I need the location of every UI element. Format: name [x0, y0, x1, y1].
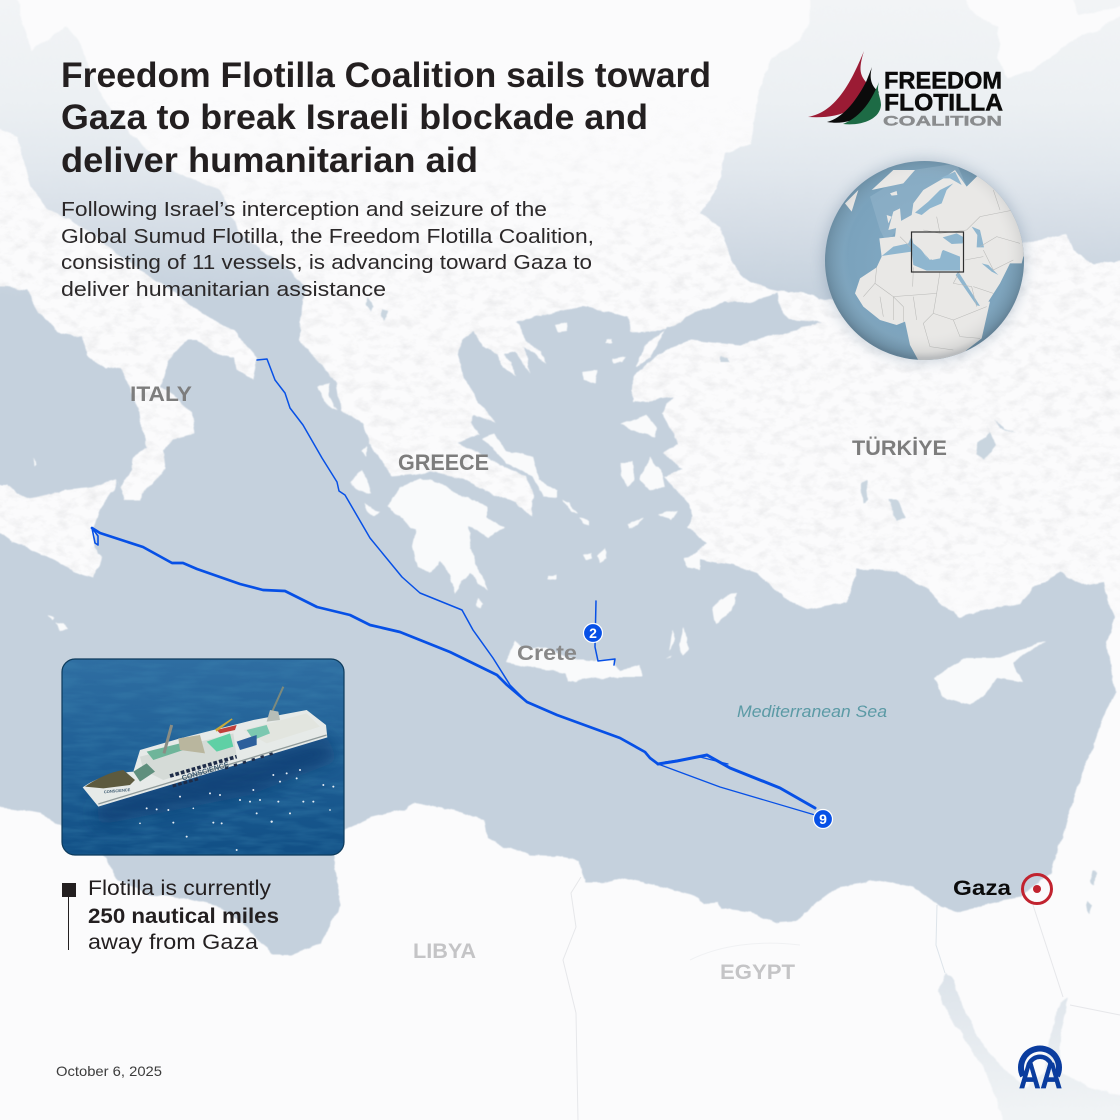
Gaza label and marker — [953, 874, 1052, 904]
logo: Freedom Flotilla Coalition — [808, 51, 1003, 128]
route north of Crete — [595, 601, 615, 665]
country labels: LIBYA — [413, 940, 476, 963]
subtitle text block: consisting of 11 vessels, is advancing toward Gaza to — [61, 252, 592, 274]
gulfs of Suez and Aqaba — [938, 973, 1120, 1120]
title: Gaza to break Israeli blockade and — [61, 98, 648, 137]
country labels — [130, 383, 947, 984]
route from southern Italy — [257, 359, 527, 702]
subtitle text block: Global Sumud Flotilla, the Freedom Flotilla Coalition, — [61, 226, 594, 248]
title — [61, 56, 711, 180]
country labels: ITALY — [130, 383, 192, 406]
subtitle text block: deliver humanitarian assistance — [61, 279, 386, 301]
country labels: TÜRKİYE — [852, 437, 947, 460]
ship hull — [83, 710, 327, 807]
route marker 2: 2 — [589, 625, 597, 641]
eastern leg lower track — [658, 764, 815, 815]
callout: distance to Gaza: Flotilla is currently — [88, 877, 272, 900]
logo wordmark — [883, 68, 1003, 128]
sea: Marmara — [650, 293, 823, 357]
sea label: Mediterranean Sea — [737, 702, 887, 721]
ship photo: CONSCIENCE — [181, 760, 230, 783]
locator globe — [824, 160, 1047, 363]
callout: distance to Gaza — [62, 877, 279, 954]
country labels: Crete — [517, 642, 577, 665]
route marker 9: 9 — [819, 811, 827, 827]
Anadolu Agency logo: AA — [1019, 1055, 1062, 1096]
islands — [33, 322, 1047, 705]
callout: distance to Gaza: 250 nautical miles — [88, 905, 279, 928]
subtitle text block: Following Israel’s interception and seizure of the — [61, 199, 547, 221]
route marker 2 — [584, 624, 602, 642]
locator box — [912, 232, 964, 272]
eastern leg upper track — [658, 755, 815, 808]
sea: Tyrrhenian — [0, 287, 147, 498]
Gaza label and marker: Gaza — [953, 877, 1011, 900]
country labels: GREECE — [398, 450, 489, 475]
lakes — [365, 297, 1097, 915]
logo wordmark: FLOTILLA — [884, 90, 1003, 116]
ship photo: CONSCIENCE — [104, 787, 131, 794]
title: deliver humanitarian aid — [61, 141, 478, 180]
title: Freedom Flotilla Coalition sails toward — [61, 56, 711, 95]
sea: Azov — [1072, 0, 1120, 15]
route from Sicily — [92, 528, 658, 764]
flotilla routes — [92, 359, 815, 815]
logo wordmark: FREEDOM — [884, 68, 1002, 94]
logo sails — [808, 51, 881, 124]
logo wordmark: COALITION — [883, 112, 1002, 128]
date: October 6, 2025 — [56, 1063, 162, 1079]
land borders — [563, 877, 1120, 1120]
water sparkles — [139, 769, 334, 851]
callout: distance to Gaza: away from Gaza — [88, 931, 258, 954]
sea: Black Sea — [700, 0, 1120, 320]
ship photo — [62, 659, 344, 855]
country labels: EGYPT — [720, 961, 795, 984]
subtitle text block — [61, 199, 594, 301]
route marker 9 — [814, 810, 832, 828]
